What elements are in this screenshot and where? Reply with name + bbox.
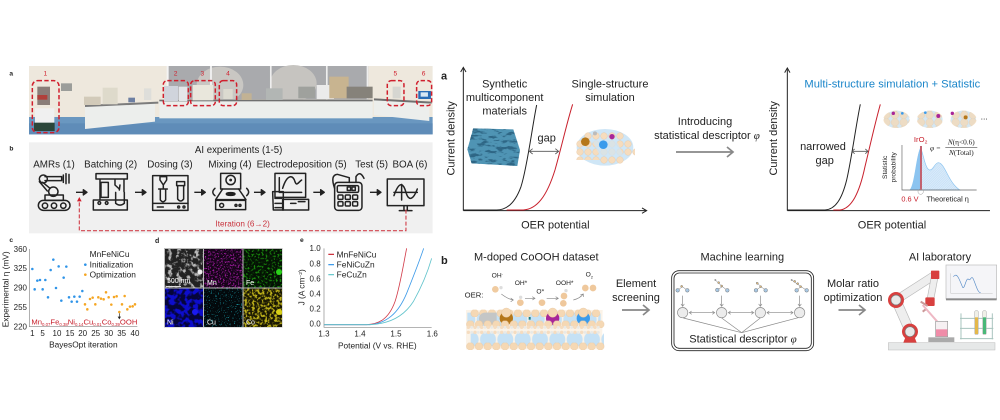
catalyst slab — [466, 308, 605, 350]
icon: batching machine — [93, 174, 127, 210]
heading: M-doped CoOOH dataset — [474, 252, 599, 264]
axis labels: 20 — [78, 329, 88, 338]
material labels — [466, 78, 648, 145]
icon: dosing station — [153, 176, 188, 210]
narrowed gap label: gap — [815, 155, 834, 167]
legend: Optimization — [90, 270, 136, 280]
workflow background — [29, 142, 433, 233]
map tiles — [164, 248, 282, 328]
curve: simulation — [507, 104, 573, 210]
species labels: OH* — [515, 280, 528, 287]
species labels: O — [586, 272, 591, 279]
gap arrow — [529, 149, 559, 154]
panel: AI experiments workflow (b) — [9, 142, 433, 233]
tick labels: ) — [296, 269, 306, 272]
icon: robot arm AMR — [38, 174, 70, 210]
tick labels: 0.4 — [310, 289, 321, 298]
axis labels: 1 — [30, 329, 35, 338]
heading: Machine learning — [700, 251, 784, 263]
species labels: O* — [536, 288, 545, 295]
panel: statistic diagram (right a, right chart) — [768, 68, 990, 231]
lab bench — [888, 343, 995, 350]
map labels: Mn — [207, 280, 217, 287]
material labels: Synthetic — [482, 78, 528, 90]
optimization points — [84, 291, 136, 313]
axis labels: 290 — [14, 284, 28, 293]
legend — [84, 249, 136, 280]
curve: experimental — [463, 105, 537, 210]
panel: polarization curves (e) — [296, 237, 438, 351]
legend: FeCuZn — [337, 270, 367, 280]
initialization points — [31, 258, 84, 303]
species labels: OH — [492, 272, 502, 279]
red dashed markers with numbers: 6 — [422, 70, 426, 77]
step labels: Mixing (4) — [208, 160, 252, 171]
label e: e — [300, 237, 304, 244]
OER label: OER: — [465, 290, 483, 299]
gap arrow — [852, 149, 868, 154]
tick labels: 1.0 — [310, 244, 321, 253]
species labels: 2 — [591, 274, 594, 279]
best composition formula: 0.14 — [75, 322, 84, 327]
icon: electrodeposition workstation — [273, 173, 309, 210]
descriptor formula — [930, 137, 977, 157]
step labels: Dosing (3) — [147, 160, 193, 171]
step labels: Batching (2) — [84, 160, 137, 171]
tick labels: −2 — [298, 272, 304, 278]
reaction arrows — [501, 294, 583, 302]
material labels: Single-structure — [572, 78, 648, 90]
tick labels: 1.3 — [318, 330, 330, 339]
tick labels: 0.8 — [310, 259, 321, 268]
descriptor formula: N(Total) — [948, 148, 974, 157]
arrow: introducing statistical descriptor: statistical descriptor φ — [654, 130, 760, 142]
panel: elemental mapping (d) — [155, 238, 282, 328]
axis labels: 15 — [66, 329, 75, 338]
arrow label: Element — [616, 278, 656, 290]
axis labels: BayesOpt iteration — [49, 339, 118, 349]
network nodes and links — [677, 296, 805, 333]
single-structure illustration — [576, 129, 635, 166]
tick labels: 1.4 — [354, 330, 366, 339]
map labels — [166, 278, 255, 326]
panel: AI laboratory — [888, 251, 997, 350]
icon: mixer — [213, 173, 249, 210]
axis labels: 30 — [104, 329, 114, 338]
axis labels: 325 — [14, 264, 28, 273]
tick labels: 1.6 — [427, 330, 438, 339]
step labels: Electrodeposition (5) — [257, 160, 347, 171]
step labels — [33, 160, 427, 171]
label c: c — [9, 237, 13, 244]
label b: b — [441, 255, 448, 267]
red dashed markers with numbers: 3 — [200, 70, 204, 77]
robot arm — [888, 271, 939, 343]
tick labels: 0.6 — [310, 274, 321, 283]
panel: gap diagram (right a, left chart) — [441, 67, 648, 231]
red dashed markers with numbers: 4 — [226, 70, 230, 77]
beaker on hotplate — [928, 321, 954, 342]
narrowed gap label: narrowed — [800, 141, 846, 153]
structure thumbnails — [883, 111, 988, 128]
tick labels: J (A cm — [296, 278, 306, 305]
axis labels: 10 — [53, 329, 62, 338]
arrow: molar ratio optimization — [824, 278, 882, 315]
red dashed markers with numbers: 5 — [393, 70, 397, 77]
arrow: introducing statistical descriptor — [654, 116, 760, 157]
iteration loop arrow — [77, 197, 406, 231]
axes — [29, 249, 137, 327]
legend: Initialization — [90, 260, 134, 270]
step labels: AMRs (1) — [33, 160, 75, 171]
distribution inset: 0.6 V — [901, 195, 919, 204]
panel: statistic diagram (right a, right chart): OER potential — [858, 219, 926, 231]
iteration label: Iteration (6→2) — [215, 220, 270, 229]
best point arrow — [118, 313, 121, 319]
label d: d — [155, 238, 159, 245]
curves — [324, 248, 432, 325]
legend: MnFeNiCu — [90, 249, 130, 259]
axis labels: 255 — [14, 303, 28, 312]
axis labels: 35 — [117, 329, 127, 338]
red dashed markers with numbers — [32, 70, 432, 133]
axis titles: Current density — [768, 101, 780, 176]
species labels: OOH* — [556, 280, 574, 287]
heading: AI experiments: AI experiments (1-5) — [195, 145, 282, 156]
panel: BayesOpt scatter (c) — [1, 237, 140, 349]
best composition formula: Mn — [31, 317, 42, 326]
legend — [328, 249, 377, 280]
icon: BOA monitor — [387, 179, 424, 211]
heading: AI laboratory — [909, 251, 972, 263]
tick labels: 0.0 — [310, 320, 321, 329]
axis labels: 25 — [91, 329, 101, 338]
axes — [461, 67, 647, 213]
adsorbates — [492, 285, 596, 307]
axis labels: 40 — [131, 329, 140, 338]
arrows between steps — [76, 190, 381, 195]
species labels: - — [502, 271, 504, 276]
photo: panorama of laboratory — [29, 65, 433, 134]
distribution inset: IrO — [914, 135, 925, 144]
tick labels: 1.5 — [390, 330, 402, 339]
material labels: simulation — [585, 92, 635, 104]
axis labels: Experimental η (mV) — [1, 251, 11, 327]
best composition formula: OOH — [120, 317, 137, 326]
panel: M-doped CoOOH dataset (b) — [441, 252, 605, 350]
species labels — [492, 271, 594, 295]
distribution inset: 2 — [925, 139, 928, 145]
map labels: Co — [246, 320, 255, 326]
material labels: gap — [537, 133, 556, 145]
legend: MnFeNiCu — [337, 249, 377, 259]
curves — [787, 104, 860, 210]
axis titles: Current density — [445, 101, 457, 176]
molecule fragments — [676, 279, 808, 292]
step labels: Test (5) — [355, 160, 388, 171]
red dashed markers with numbers: 2 — [174, 70, 178, 77]
legend: FeNiCuZn — [337, 260, 375, 270]
axis labels: 220 — [14, 322, 28, 331]
narrowed gap label — [800, 141, 846, 167]
arrow: element screening — [612, 278, 660, 315]
heading: Multi-structure simulation + Statistic — [804, 78, 981, 90]
structure thumbnails: ... — [981, 111, 988, 121]
distribution inset: Theoretical η — [926, 195, 969, 204]
axes — [785, 68, 990, 211]
distribution inset: Statistic — [882, 155, 889, 179]
tick labels — [296, 244, 438, 351]
arrow: molar ratio optimization: optimization — [824, 292, 882, 304]
double-line frame — [672, 271, 814, 351]
best composition formula: 0.07 — [42, 322, 51, 327]
icon: test meter — [333, 174, 364, 210]
descriptor label: Statistical descriptor φ — [689, 334, 797, 346]
label a: a — [441, 70, 448, 82]
arrow label: Introducing — [678, 116, 732, 128]
best composition formula: 0.01 — [93, 322, 102, 327]
descriptor formula: N(η<0.6) — [947, 137, 975, 146]
axis labels: 360 — [14, 245, 28, 254]
arrow: element screening: screening — [612, 292, 660, 304]
distribution inset: probability — [890, 151, 897, 182]
material labels: multicomponent — [466, 92, 543, 104]
map labels: Fe — [246, 280, 254, 287]
map labels: 500 nm — [167, 278, 191, 285]
axis labels: 5 — [40, 329, 45, 338]
red dashed markers with numbers: 1 — [43, 70, 47, 77]
distribution inset — [882, 135, 977, 204]
material labels: materials — [482, 106, 527, 118]
tick labels: 0.2 — [310, 304, 321, 313]
best composition formula: Cu — [83, 317, 93, 326]
map labels: Ni — [167, 320, 174, 326]
best composition formula: 0.38 — [59, 322, 68, 327]
best composition formula: 0.39 — [111, 322, 121, 327]
panel: machine learning — [672, 251, 814, 351]
panel: lab photo (a) — [9, 65, 433, 134]
best composition formula: Co — [102, 317, 111, 326]
arrow label: Molar ratio — [827, 278, 879, 290]
best composition formula: Fe — [50, 317, 59, 326]
axes — [324, 248, 432, 327]
test tube rack — [960, 311, 993, 339]
axis labels — [1, 245, 140, 349]
map labels: Cu — [207, 320, 216, 326]
tick labels: Potential (V vs. RHE) — [338, 341, 417, 351]
material illustration — [467, 128, 520, 166]
chart screen — [946, 265, 997, 300]
best composition formula: Ni — [68, 317, 75, 326]
step labels: BOA (6) — [392, 160, 427, 171]
descriptor formula: φ = — [930, 143, 941, 152]
label a: a — [9, 70, 13, 77]
label b: b — [9, 146, 13, 153]
panel: gap diagram (right a, left chart): OER potential — [521, 219, 590, 231]
